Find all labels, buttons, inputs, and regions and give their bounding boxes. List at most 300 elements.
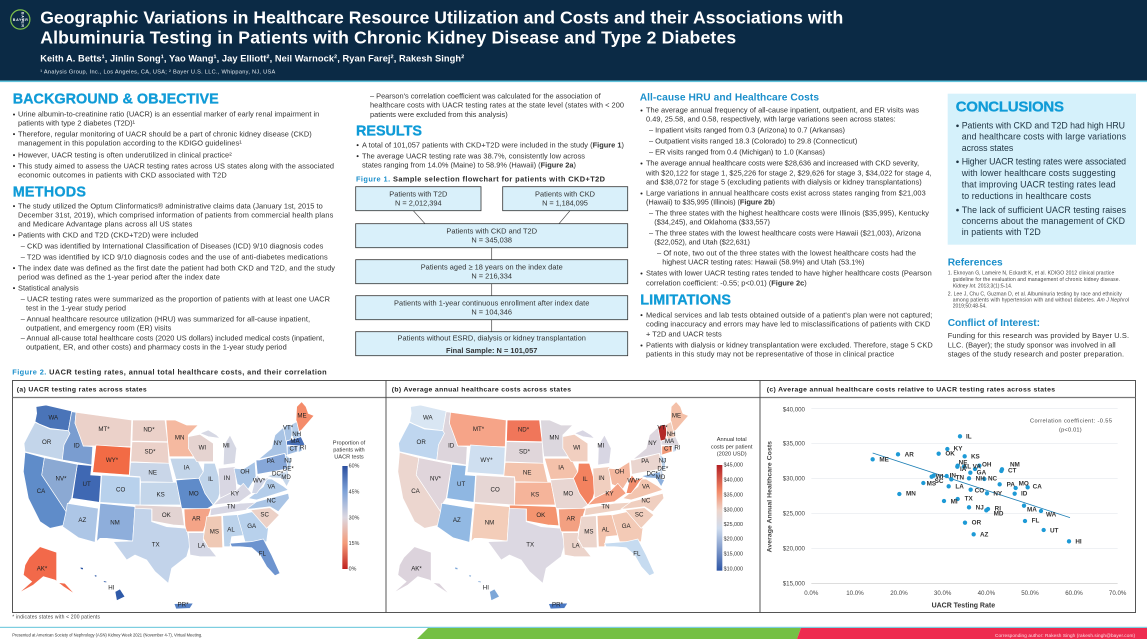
references [948,257,1130,309]
state labels a: LA [198,542,206,549]
legend b: $15,000 [724,552,743,558]
affiliations: ¹ Analysis Group, Inc., Los Angeles, CA, USA; ² Bayer U.S. LLC., Whippany, NJ, USA [40,70,275,76]
state labels a: AZ [78,517,87,524]
scatter labels: CA [1033,484,1042,491]
section: background and objective [13,91,334,179]
trend line [873,453,1070,518]
y axis labels: $20,000 [783,545,806,552]
section: limitations: Patients with dialysis or kidney transplantation were excluded. Therefore, stage 5 CKD [646,341,933,350]
y axis labels [783,407,806,587]
section: methods: December 31st, 2019), which comprised information of patients from commercial health plans [18,210,334,219]
state labels b: MD [656,474,666,481]
section: background and objective: BACKGROUND & OBJECTIVE [13,91,219,107]
state labels b: NV* [430,476,442,483]
state labels a: CT [290,446,298,453]
conflict of interest: LLC. (Bayer); the study sponsor was involved in all [948,340,1116,349]
state labels a: VA [267,483,276,490]
y axis labels: $15,000 [783,580,806,587]
section: all-cause HRU and costs: – The three states with the lowest healthcare costs were Hawaii ($21,003), Arizona [649,229,922,238]
state labels a: MA [290,438,301,445]
scatter labels: CO [975,488,984,495]
scatter labels: AR [905,452,914,459]
state labels b: NJ [659,458,666,465]
panel: conclusions: that improving UACR testing rates lead [962,180,1116,190]
scatter labels: FL [1032,517,1040,524]
scatter labels: MA [1027,506,1037,513]
state labels b: RI [674,445,681,452]
section: all-cause HRU and costs: – Outpatient visits ranged 18.3 (Colorado) to 29.8 (Connecticut) [649,137,857,146]
panel: conclusions: with lower healthcare costs suggesting [961,168,1116,178]
state labels a: AR [192,515,201,522]
scatter labels: PA [1007,481,1015,488]
section: results: states ranging from 14.0% (Maine) to 58.9% (Hawaii) (Figure 2a) [362,161,576,170]
references: Kidney Int. 2013;3(1):5-14. [953,283,1012,289]
state labels b: MN [549,435,559,442]
conflict of interest: stages of the study research and poster preparation. [948,349,1124,358]
legend a: 30% [349,515,360,521]
panel b: healthcare cost map [393,402,688,609]
section: background and objective: However, UACR testing is often underutilized in clinical practice² [18,150,232,159]
scatter labels: GA [977,470,987,477]
legend a [333,440,366,572]
section: methods: and Medicare Advantage plans across all US states [18,219,193,228]
state labels b: AR [567,515,576,522]
correlation annotation: (p<0.01) [1059,427,1082,433]
section: methods: – UACR testing rates were summarized as the proportion of patients with at least one UACR [21,294,330,303]
header banner [0,0,1147,82]
state labels b: CO [491,487,500,494]
scatter labels: IL [966,433,972,440]
legend a: 45% [349,490,360,496]
state labels b: VA [642,483,651,490]
panel: conclusions: Higher UACR testing rates were associated [962,157,1126,167]
state labels b: AZ [453,517,461,524]
section: methods: – Annual healthcare resource utilization (HRU) was summarized for all-cause inpatient, [21,314,310,323]
legend a: 0% [349,566,357,572]
state labels a: CA [37,488,46,495]
state labels b: KY [605,491,614,498]
section: methods [13,91,624,352]
state labels a: NH [292,431,301,438]
axis titles: UACR Testing Rate [932,603,995,610]
scatter labels: NC [988,476,998,483]
state labels a: AK* [37,566,48,573]
section: all-cause HRU and costs: correlation coefficient: -0.55; p<0.01) (Figure 2c) [646,279,807,288]
state labels b: WY* [480,457,493,464]
state labels b: CA [411,488,421,495]
scatter labels: OR [972,520,982,527]
state labels b: KS [531,491,539,498]
legend a: UACR tests [334,454,364,460]
section: methods: – Annual all-cause total healthcare costs (2020 US dollars) included medical costs (inpatient, [21,333,324,342]
state labels a: GA [247,523,257,530]
title [40,7,843,47]
legend a: Proportion of [333,440,366,446]
panel: conclusions: concerns about the management of CKD [962,216,1125,226]
references: 2019;50:48-54. [953,303,987,309]
state labels a: HI [108,584,115,591]
state labels b: FL [633,550,641,557]
panel: conclusions: across states [962,143,1014,153]
state labels a: NV* [56,476,67,483]
y axis labels: $40,000 [783,407,806,414]
scatter labels: WI [936,473,944,480]
state labels b: AK* [411,566,422,573]
axis titles [766,441,995,610]
section: results: RESULTS [356,124,422,140]
box: aged 18 or over [356,260,628,284]
box: aged 18 or over: N = 216,334 [471,272,512,281]
section: methods: METHODS [13,185,86,201]
icon: Bayer logo: BAYER [13,18,28,22]
state labels b: IN [598,475,605,482]
scatter labels: MO [1019,480,1029,487]
section: all-cause HRU and costs: – Of note, two out of the three states with the lowest healthcare costs had the [657,249,916,258]
section: all-cause HRU and costs: and $38,072 for stage 5 (excluding patients with dialysis or kidney transplantations) [646,178,922,187]
scatter labels: NE [959,459,967,466]
scatter labels: UT [1050,528,1059,535]
box: continuous enrollment: Patients with 1-year continuous enrollment after index date [394,299,589,308]
state labels b: MS [584,529,593,536]
scatter labels: ID [1021,491,1028,498]
legend b: $30,000 [724,507,743,513]
section: all-cause HRU and costs: – The three states with the highest healthcare costs were Illinois ($35,995), Kentucky [649,209,929,218]
section: methods: – T2D was identified by ICD 9/10 diagnosis codes and the use of anti-diabetes medications [21,252,328,261]
figure 1 flowchart [356,175,628,356]
section: background and objective: management in this population according to the KDIGO guidelines¹ [18,138,242,147]
state labels a: NE [148,470,157,477]
state labels b: LA [572,542,580,549]
state labels b: GA [622,523,631,530]
section: methods: The index date was defined as the first date the patient had both CKD and T2D, and the study [18,263,335,272]
section: methods: Statistical analysis [18,283,79,292]
box: continuous enrollment [356,296,628,320]
state labels a: CO [116,487,125,494]
x axis labels: 60.0% [1065,590,1083,597]
authors: Keith A. Betts¹, Jinlin Song¹, Yao Wang¹, Jay Elliott², Neil Warnock², Ryan Farej², Rakesh Singh² [40,54,464,64]
section: all-cause HRU and costs: highest UACR testing rates: Hawaii (58.9%) and Utah (53.1%) [662,258,864,267]
box: CKD and T2D [356,224,628,248]
scatter labels: AL [963,463,971,470]
state labels b: NY [648,440,657,447]
figure 2 heading: Figure 2. UACR testing rates, annual total healthcare costs, and their correlation [12,368,327,377]
axis titles: Average Annual Healthcare Costs [766,441,773,552]
scatter labels: TX [965,496,974,503]
section: all-cause HRU and costs: The average annual frequency of all-cause inpatient, outpatient, and ER visits was [646,106,919,115]
scatter points [870,434,1071,543]
choropleth states a [18,402,314,609]
section: limitations: coding inaccuracy and errors may have led to misclassifications of patients with CKD [646,320,930,329]
box: CKD and T2D: N = 345,038 [471,236,512,245]
panel: conclusions: and healthcare costs with large variations [962,132,1127,142]
state labels a: WI [199,444,206,451]
section: all-cause HRU and costs: The average annual healthcare costs were $28,636 and increased with CKD severity, [646,159,919,168]
section: limitations: Medical services and lab tests obtained outside of a patient's plan were not captured; [646,310,932,319]
state labels a: OR [42,439,52,446]
state labels b: NM [485,520,494,527]
state labels b: VT* [657,424,668,431]
scatter labels: MD [994,511,1004,518]
box: aged 18 or over: Patients aged ≥ 18 years on the index date [421,263,563,272]
legend b: $35,000 [724,493,743,499]
state labels a: KS [157,491,165,498]
state labels b: WA [423,415,434,422]
scatter labels: NY [993,491,1003,498]
state labels b: PA [641,458,650,465]
section: methods: – CKD was identified by International Classification of Diseases (ICD) 9/10 diagnosis codes [21,241,324,250]
state labels a: RI [300,445,306,452]
correlation annotation [1030,419,1112,433]
scatter labels: HI [1075,538,1082,545]
section: limitations: + T2D and UACR tests [646,330,722,339]
x axis labels: 10.0% [846,590,864,597]
state labels b: UT [457,481,466,488]
state labels b: MO [563,491,573,498]
state labels a: ID [74,443,80,450]
state labels a: IA [184,465,190,472]
panel b heading: (b) Average annual healthcare costs across states [392,386,571,394]
section: all-cause HRU and costs: 0.49, 25.58, and 0.58, respectively, with large variations seen across states: [646,115,896,124]
legend b: $10,000 [724,567,743,573]
state labels a: MN [175,435,184,442]
box: patients with T2D: Patients with T2D [389,190,447,199]
footer conference note: Presented at American Society of Nephrology (ASN) Kidney Week 2021 (November 4-7), Virtual Meeting. [12,633,202,638]
legend b: $40,000 [724,478,743,484]
scatter labels: NJ [976,505,984,512]
legend a: patients with [333,448,365,454]
panel a heading: (a) UACR testing rates across states [17,386,147,393]
state labels a: NC [267,497,276,504]
scatter labels: TN [956,474,965,481]
state labels b: ID [448,443,455,450]
box: patients with T2D: N = 2,012,394 [395,199,442,208]
section: results: The average UACR testing rate was 38.7%, consistently low across [362,151,585,160]
panel: conclusions [948,94,1136,245]
section: all-cause HRU and costs: – Inpatient visits ranged from 0.3 (Arizona) to 0.7 (Arkansas) [649,126,845,135]
references: among patients with hypertension with and without diabetes. Am J Nephrol [953,297,1130,303]
state labels a: SC [260,512,269,519]
title: Geographic Variations in Healthcare Resource Utilization and Costs and their Associations with [40,7,843,27]
state labels a: WY* [106,457,119,464]
section: background and objective: economic outcomes in patients with CKD associated with T2D [18,170,227,179]
state labels b: HI [483,584,489,591]
section: all-cause HRU and costs: ($22,052), and Utah ($22,631) [654,238,750,247]
section: methods: healthcare costs with UACR testing rates at the state level (states with < 200 [370,101,624,110]
state labels a: SD* [145,448,156,455]
box: continuous enrollment: N = 104,346 [471,308,512,317]
state labels a: MI [223,442,230,449]
state labels b: WV* [627,477,640,484]
choropleth states b [393,402,688,609]
legend b [711,437,753,573]
state labels a: PR* [178,602,189,609]
scatter labels: OH [982,462,992,469]
section: all-cause HRU and costs: All-cause HRU and Healthcare Costs [640,93,819,104]
box: final sample [356,332,628,356]
state labels a: WA [48,415,59,422]
state labels a: IL [208,476,214,483]
state labels b: PR* [552,602,564,609]
y axis labels: $30,000 [783,475,806,482]
state labels a: AL [227,526,235,533]
y axis labels: $35,000 [783,440,806,447]
scatter labels: VA [973,463,981,470]
state labels b: IL [583,476,588,483]
state labels b: ME [672,413,681,420]
conflict of interest: Funding for this research was provided by Bayer U.S. [948,331,1129,340]
state labels b: MA [665,438,675,445]
state labels b: TN [601,504,610,511]
panel: conclusions: to reductions in healthcare costs [962,191,1092,201]
state labels a: OK [162,512,172,519]
panel: conclusions: in patients with T2D [962,227,1041,237]
references: guideline for the evaluation and management of chronic kidney disease. [953,277,1120,283]
scatter labels: KS [971,454,980,461]
footnote: * indicates states with < 200 patients [12,614,100,620]
state labels b [411,413,681,609]
legend b: $45,000 [724,463,743,469]
section: background and objective: Therefore, regular monitoring of UACR should be a part of chronic kidney disease (CKD) [18,129,312,138]
panel c: scatter plot [766,407,1127,610]
state labels b: WI [573,444,581,451]
section: methods: patients were excluded from this analysis) [370,110,508,119]
state labels a: ND* [143,427,155,434]
state labels a: VT* [283,424,294,431]
state labels a: ME [297,413,307,420]
legend b: $25,000 [724,522,743,528]
references: References [948,257,1003,268]
legend b: (2020 USD) [717,452,747,458]
state labels b: MI [597,442,605,449]
state labels a: MD [281,474,291,481]
scatter labels: MI [951,498,958,505]
state labels b: MT* [473,426,485,433]
section: all-cause HRU and costs [640,93,932,288]
section: background and objective: Urine albumin-to-creatinine ratio (UACR) is an essential marker of early renal impairment in [18,110,319,119]
figure 1 flowchart: Figure 1. Sample selection flowchart for patients with CKD+T2D [356,175,606,184]
section: limitations: patients in this study may not be representative of those in clinical practice [646,350,894,359]
scatter labels: NH [976,476,985,483]
section: all-cause HRU and costs: Large variations in annual healthcare costs exist across states ranging from $21,003 [646,189,926,198]
x axis labels: 30.0% [934,590,952,597]
x axis labels: 20.0% [890,590,908,597]
section: background and objective: patients with type 2 diabetes (T2D)¹ [18,118,136,127]
state labels a: NJ [284,458,292,465]
state labels b: NC [641,497,651,504]
scatter labels [879,433,1082,545]
state labels b: AL [602,526,610,533]
x axis labels: 40.0% [978,590,996,597]
legend a: 15% [349,541,360,547]
state labels a: UT [83,481,91,488]
references: 1. Eknoyan G, Lameire N, Eckardt K, et al. KDIGO 2012 clinical practice [948,270,1115,276]
state labels b: DE* [657,466,669,473]
state labels b: IA [558,465,565,472]
state labels a: TN [227,504,235,511]
scatter labels: OK [945,451,955,458]
state labels a [37,413,307,609]
state labels a: WV* [253,477,266,484]
state labels b: DC* [647,470,658,477]
box: patients with CKD: Patients with CKD [535,190,595,199]
corresponding author: Corresponding author: Rakesh Singh (rakesh.singh@bayer.com) [995,633,1135,638]
state labels a: DE* [283,466,294,473]
y axis labels: $25,000 [783,510,806,517]
legend b: $20,000 [724,537,743,543]
scatter labels: CT [1008,468,1017,475]
section: all-cause HRU and costs: States with lower UACR testing rates tended to have higher healthcare costs (Pearson [646,269,932,278]
state labels b: NE [523,470,531,477]
state labels a: PA [267,458,275,465]
scatter labels: NM [1010,462,1020,469]
box: final sample: Patients without ESRD, dialysis or kidney transplantation [398,334,586,342]
box: CKD and T2D: Patients with CKD and T2D [446,227,537,236]
scatter labels: KY [954,446,963,453]
box: patients with CKD [503,187,628,211]
state labels a: NM [110,520,120,527]
legend a: 60% [349,464,360,470]
references: 2. Lee J, Chu C, Guzman D, et al. Albuminuria testing by race and ethnicity [948,292,1122,298]
scatter labels: RI [995,505,1001,512]
scatter labels: IA [960,466,967,473]
section: methods: period was defined as the 1-year period after the index date [18,272,220,281]
state labels b: OK [536,512,546,519]
section: limitations: LIMITATIONS [640,293,731,309]
scatter labels: SC [935,478,944,485]
state labels a: KY [231,491,239,498]
correlation annotation: Correlation coefficient: -0.55 [1030,419,1112,425]
section: all-cause HRU and costs: – ER visits ranged from 0.4 (Michigan) to 1.0 (Kansas) [649,148,825,157]
state labels a: MT* [98,426,110,433]
section: methods: Patients with CKD and T2D (CKD+T2D) were included [18,230,198,239]
state labels b: NH [667,431,676,438]
x axis labels: 70.0% [1109,590,1127,597]
state labels a: DC* [272,470,284,477]
section: limitations [640,293,933,359]
panel: conclusions: The lack of sufficient UACR testing raises [962,205,1127,215]
box: patients with CKD: N = 1,184,095 [542,199,588,208]
footer band [0,627,1147,639]
state labels b: CT [664,446,673,453]
section: background and objective: This study aimed to assess the UACR testing rates across US states along with the associated [18,161,334,170]
scatter labels: MN [906,491,916,498]
section: methods: – Pearson's correlation coefficient was calculated for the association of [370,91,602,100]
section: all-cause HRU and costs: with $20,122 for stage 1, $25,226 for stage 2, $29,626 for stage 3, $34,022 for stage 4, [645,169,932,178]
state labels b: SC [635,512,644,519]
section: all-cause HRU and costs: (Hawaii) to $35,995 (Illinois) (Figure 2b) [646,198,775,207]
x axis labels: 50.0% [1021,590,1039,597]
state labels a: MO [189,491,199,498]
figure 2 frames [12,380,1136,612]
section: methods: test in the 1-year study period [26,303,126,312]
panel c heading: (c) Average annual healthcare costs relative to UACR testing rates across states [767,386,1055,394]
state labels b: TX [526,542,534,549]
scatter labels: LA [955,484,964,491]
icon: Bayer logo [11,10,30,29]
scatter labels: MS [927,480,936,487]
scatter labels: AZ [980,532,989,539]
legend b: Annual total [717,437,747,443]
x axis labels [804,590,1127,597]
state labels a: MS [210,529,219,536]
scatter labels: IN [950,472,956,479]
scatter labels: ME [879,457,889,464]
legend b: costs per patient [711,444,753,450]
section: methods: The study utilized the Optum Clinformatics® administrative claims data (January 1st, 2015 to [18,201,323,210]
conflict of interest: Conflict of Interest: [948,318,1040,329]
box: final sample: Final Sample: N = 101,057 [446,346,537,355]
panel: conclusions: CONCLUSIONS [956,98,1064,115]
